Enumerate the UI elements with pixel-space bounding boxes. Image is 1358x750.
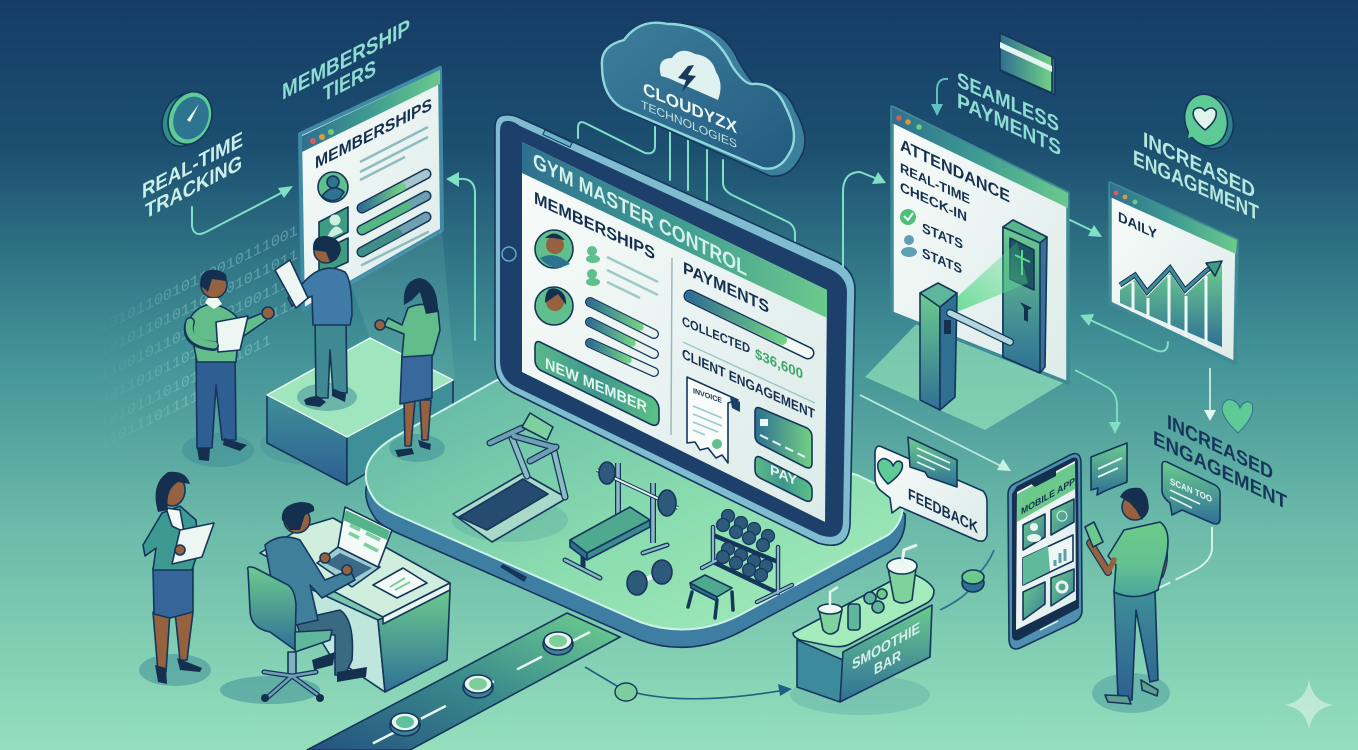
heading: Gym Master Control: GYM MASTER CONTROL: [533, 148, 747, 281]
payment card: [755, 408, 812, 468]
arrow: attendance to daily: [1070, 220, 1102, 237]
binary data stream: 1010110101100101011011: [100, 246, 298, 362]
desk with laptop: [220, 507, 450, 704]
arrow: tablet to memberships: [446, 172, 475, 340]
panel: tablet dashboard: [495, 115, 855, 545]
button: pay: PAY: [770, 463, 797, 490]
heading: Seamless Payments: SEAMLESS: [957, 67, 1059, 137]
arrow: road to smoothie bar: [585, 667, 792, 701]
heading: Increased Engagement (top): INCREASED: [1143, 127, 1255, 203]
person: man on podium: [275, 236, 357, 411]
smoothie bar: [790, 545, 934, 715]
cloud logo: Cloudyzx Technologies: CLOUDYZX: [643, 79, 737, 137]
binary data stream: 1010111010110111011: [100, 331, 271, 434]
cloud logo: Cloudyzx Technologies: TECHNOLOGIES: [641, 97, 737, 151]
invoice: INVOICE: [693, 386, 722, 405]
icon: stool: [688, 575, 733, 618]
scan beam: [957, 242, 1028, 312]
smoothie bar: BAR: [874, 647, 901, 679]
small chat bubble: [1091, 443, 1127, 495]
mobile phone app: MOBILE APP: [1021, 476, 1075, 518]
smoothie bar: SMOOTHIE: [852, 619, 920, 674]
arrow: attendance to mobile: [1075, 370, 1121, 434]
icon: dumbbell: [627, 560, 672, 595]
binary data stream: 1010110010110010111001: [100, 222, 298, 338]
heading: Real-Time Tracking: REAL-TIME: [142, 127, 243, 204]
section: memberships list: [534, 188, 658, 372]
button: new member: [535, 342, 659, 425]
section: memberships list: MEMBERSHIPS: [534, 188, 655, 264]
callout: feedback: [875, 437, 987, 541]
panel: memberships: [300, 68, 442, 310]
section: payments: PAYMENTS: [683, 258, 769, 317]
binary data stream: [100, 222, 298, 454]
attendance floor glow: [865, 310, 1068, 430]
person: woman with clipboard: [139, 472, 214, 686]
panel: attendance: STATS: [922, 245, 962, 277]
invoice: [687, 377, 740, 463]
panel: attendance: ATTENDANCE: [900, 135, 1010, 207]
binary data stream: 11011101111: [100, 387, 199, 454]
heart icon: [1222, 400, 1253, 433]
turnstile door: [1003, 220, 1047, 373]
panel: attendance: CHECK-IN: [900, 180, 967, 226]
watermark star: [1284, 679, 1334, 730]
panel: daily chart: DAILY: [1118, 210, 1157, 243]
person: man with clipboard: [182, 270, 274, 467]
arrow: daily to engagement: [1204, 368, 1216, 421]
person: woman presenting: [375, 278, 445, 462]
section: payments: CLIENT ENGAGEMENT: [682, 347, 815, 423]
link node by feedback: [940, 550, 994, 610]
icon: credit card: [1000, 33, 1055, 95]
callout: scan tool: SCAN TOO: [1170, 475, 1212, 504]
callout: scan tool: [1162, 462, 1220, 524]
panel: daily chart: [1110, 183, 1237, 363]
cloud connectors: [578, 122, 795, 243]
arrow: tablet to mobile app: [860, 395, 1011, 471]
panel: attendance: REAL-TIME: [900, 161, 970, 208]
section: payments: [682, 258, 815, 423]
icon: dumbbell rack: [702, 510, 792, 602]
section: payments: $36,600: [755, 347, 803, 383]
heading: Increased Engagement (bottom): INCREASED: [1167, 411, 1273, 485]
panel: attendance: [892, 107, 1068, 383]
button: new member: NEW MEMBER: [545, 355, 647, 417]
panel: attendance: STATS: [922, 220, 963, 252]
podium: [260, 338, 453, 485]
panel: memberships: MEMBERSHIPS: [315, 94, 432, 173]
arrow: tracking to memberships: [192, 186, 293, 234]
callout: feedback: FEEDBACK: [908, 485, 979, 537]
divider: [671, 258, 672, 435]
dashed link from callout to person: [1155, 527, 1212, 590]
gym floor platform: [366, 380, 905, 647]
icon: gauge: [154, 85, 220, 153]
heading: Membership Tiers: TIERS: [323, 55, 376, 107]
light beam under memberships panel: [350, 230, 455, 380]
icon: weight bench: [565, 462, 678, 578]
heading: Real-Time Tracking: TRACKING: [145, 150, 242, 224]
heading: Increased Engagement (top): ENGAGEMENT: [1133, 145, 1259, 226]
heading: Seamless Payments: PAYMENTS: [957, 88, 1061, 161]
heading: Increased Engagement (bottom): ENGAGEMENT: [1153, 427, 1287, 514]
cloud logo: Cloudyzx Technologies: [602, 23, 805, 176]
icon: heart bubble: [1179, 89, 1239, 154]
turnstile gate: [920, 283, 1010, 410]
icon: treadmill: [452, 413, 568, 542]
office chair: [248, 567, 332, 702]
mobile phone app: [1008, 454, 1082, 649]
person: man at desk: [265, 502, 367, 682]
person: man with phone: [1085, 488, 1170, 713]
arrow: daily to attendance: [1080, 314, 1168, 351]
binary data stream: 0011010110111011101111: [100, 294, 298, 410]
road with milestones: [307, 613, 620, 750]
arrow: payments to attendance: [931, 79, 948, 116]
section: payments: COLLECTED: [682, 313, 750, 357]
binary data stream: 1100101101011101001110: [100, 270, 298, 386]
arrow: tablet to attendance: [843, 172, 886, 267]
heading: Membership Tiers: MEMBERSHIP: [282, 14, 410, 105]
button: pay: [755, 457, 812, 501]
